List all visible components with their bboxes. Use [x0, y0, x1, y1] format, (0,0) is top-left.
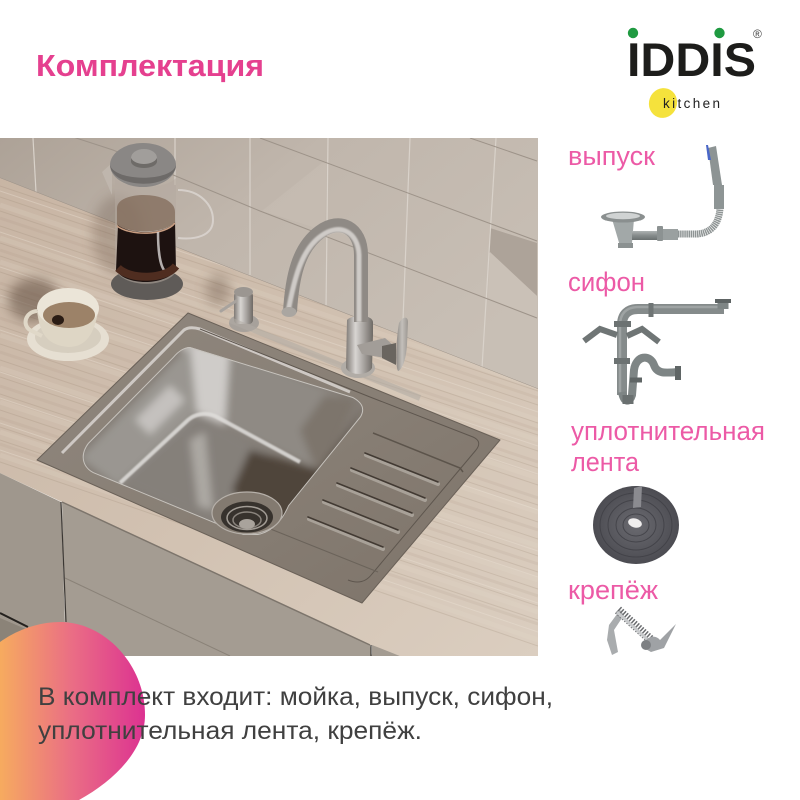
logo mark dots [628, 28, 725, 38]
sink deck [37, 313, 500, 603]
kitchen faucet [282, 225, 408, 378]
cabinet fronts [0, 473, 400, 656]
gradient blob [0, 622, 145, 800]
label: сифон [568, 267, 645, 297]
line 1: В комплект входит: мойка, выпуск, сифон, [38, 683, 553, 711]
icon: mounting clip [607, 610, 676, 655]
component: уплотнительная лента [571, 416, 765, 564]
component: выпуск [568, 141, 724, 248]
icon: sealing tape roll [593, 486, 679, 564]
shadows on the counter [8, 195, 230, 322]
logo: IDDIS kitchen [627, 27, 762, 122]
tile wall [0, 137, 538, 398]
title: Комплектация [36, 48, 264, 83]
line 2: уплотнительная лента, крепёж. [38, 717, 422, 745]
label: выпуск [568, 141, 655, 171]
label: крепёж [568, 575, 658, 605]
bright pressed rim [62, 328, 350, 453]
icon: siphon pipes [584, 301, 731, 404]
label: лента [571, 447, 640, 477]
icon: drain with overflow [601, 145, 724, 248]
countertop [0, 170, 540, 660]
drainboard grooves [308, 453, 438, 549]
body text [38, 683, 553, 745]
component: сифон [568, 267, 731, 404]
basin [80, 340, 370, 537]
drain [212, 492, 282, 534]
sink [37, 313, 500, 603]
label: уплотнительная [571, 416, 765, 446]
kitchen photo: sink on countertop [0, 137, 540, 660]
coffee cup and saucer [26, 288, 109, 361]
component: крепёж [568, 575, 676, 655]
label [571, 416, 765, 477]
french press [102, 143, 213, 300]
yellow spot [645, 84, 681, 122]
registered mark: ® [753, 27, 762, 41]
soap dispenser [221, 287, 259, 332]
logo wordmark: IDDIS [627, 33, 756, 86]
kitchen wordmark: kitchen [663, 96, 720, 111]
